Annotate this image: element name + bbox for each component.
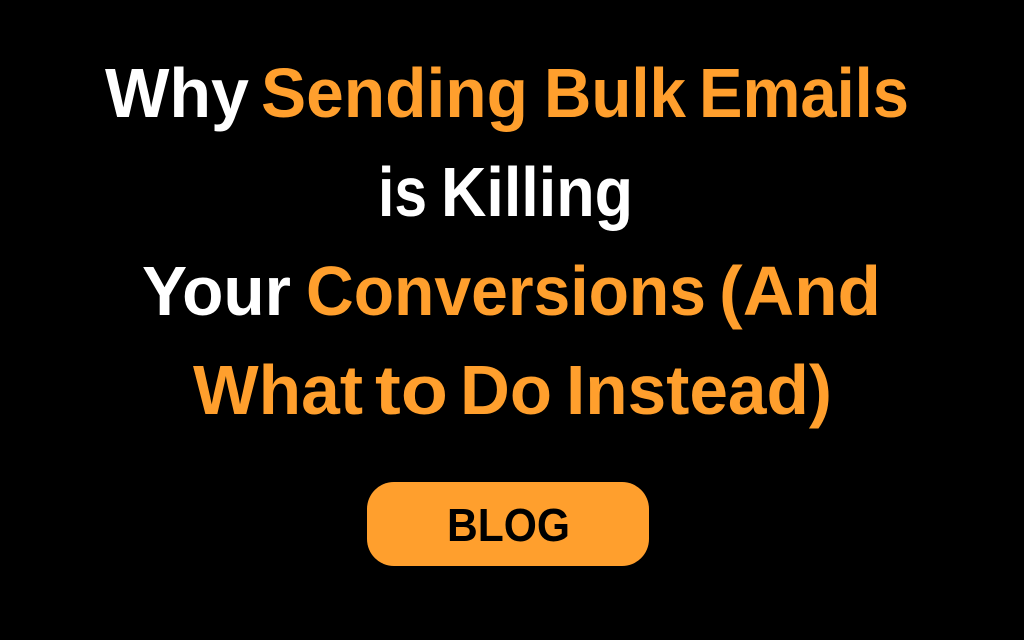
title line 1: Bulk [544,54,686,132]
title line 4: Do [460,351,552,429]
title line 4: What [193,351,363,429]
title line 3: Conversions [306,252,706,330]
title line 2 [378,153,633,231]
title line 3: (And [719,252,881,330]
title line 2: is [378,153,427,231]
button: blog: BLOG [447,499,570,551]
title line 4 [193,351,832,429]
title line 3: Your [142,252,291,330]
title [105,54,909,429]
title line 2: Killing [441,153,633,231]
title line 1 [105,54,909,132]
title line 1: Sending [261,54,528,132]
title line 4: to [375,351,448,429]
title line 3 [142,252,881,330]
button: blog [367,482,649,566]
title line 4: Instead) [566,351,832,429]
title line 1: Emails [699,54,909,132]
title line 1: Why [105,54,249,132]
